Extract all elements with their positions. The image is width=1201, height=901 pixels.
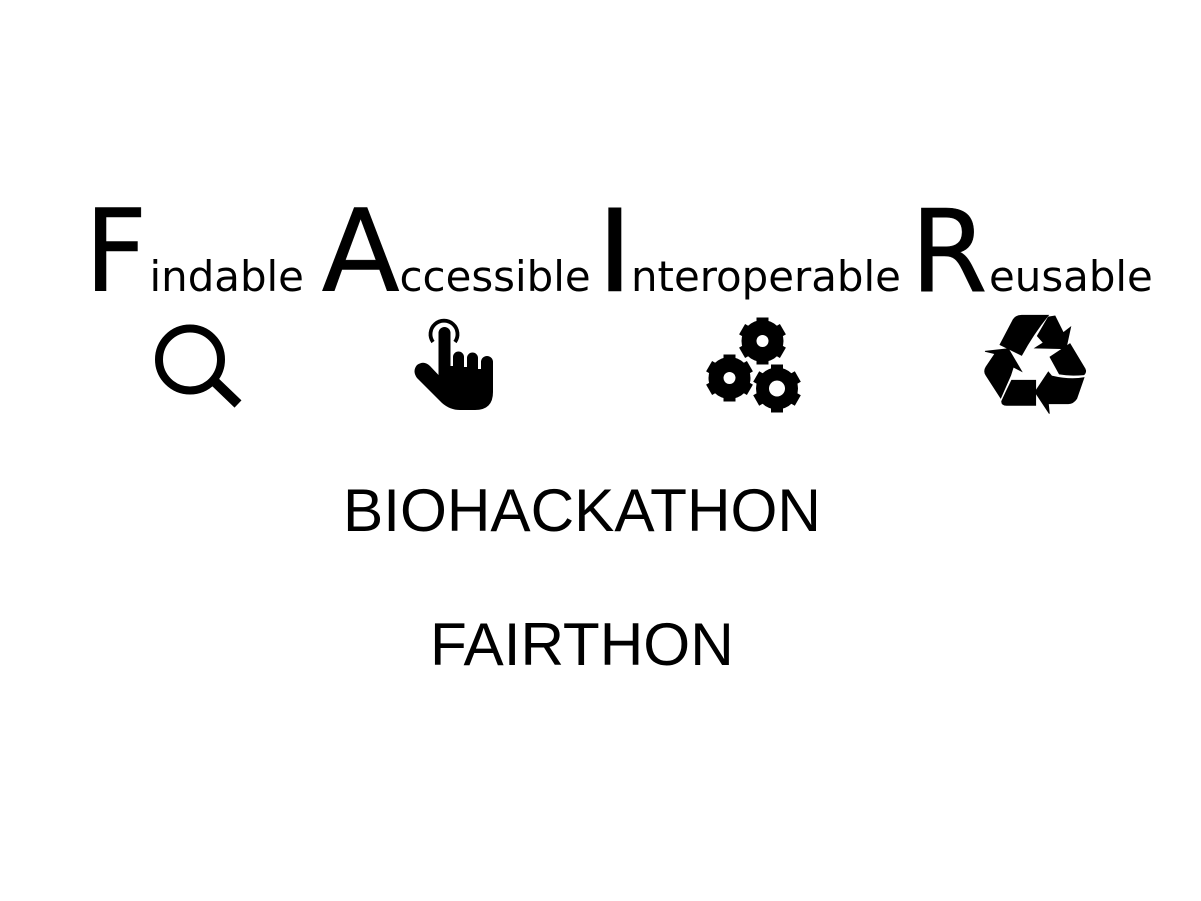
icon: recycling arrows xyxy=(985,315,1086,414)
icon: gears xyxy=(708,318,798,412)
heading: Findable: indable xyxy=(150,252,304,301)
heading: Findable: F xyxy=(85,185,147,319)
text: FAIRTHON: FAIRTHON xyxy=(430,610,734,678)
heading: Interoperable: nteroperable xyxy=(631,252,901,301)
heading: Interoperable: I xyxy=(596,185,633,319)
heading: Accessible: A xyxy=(322,186,400,319)
text: BIOHACKATHON: BIOHACKATHON xyxy=(343,476,821,544)
icon: pointing hand xyxy=(414,321,493,410)
icon: magnifying glass xyxy=(159,328,238,404)
heading: Reusable xyxy=(910,184,1153,318)
heading: Accessible: ccessible xyxy=(400,252,591,301)
gear: top xyxy=(742,318,784,364)
heading: Accessible xyxy=(322,186,591,319)
gear: right xyxy=(756,364,798,412)
heading: Interoperable xyxy=(596,185,901,319)
heading: Reusable: R xyxy=(910,184,988,318)
heading: Findable xyxy=(85,185,304,319)
heading: Reusable: eusable xyxy=(989,252,1153,301)
gear: left xyxy=(708,354,750,402)
